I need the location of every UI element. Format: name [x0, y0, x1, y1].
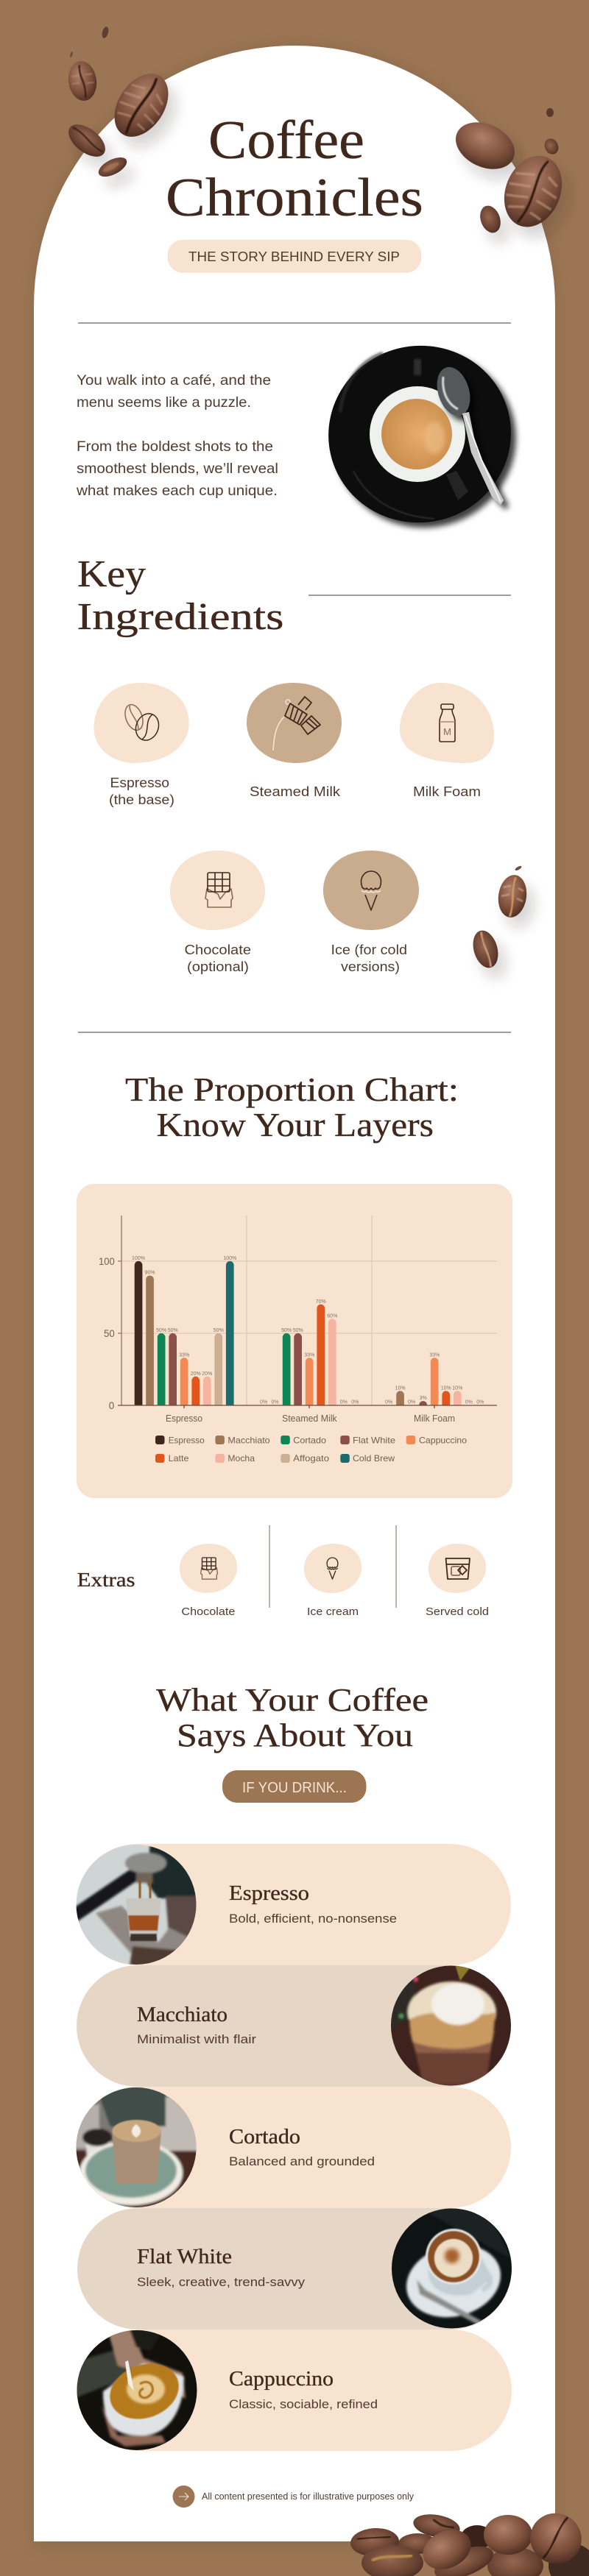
series: affogato: 50%	[214, 1328, 224, 1333]
series: mocha	[202, 1313, 462, 1405]
ingredient: ice: versions)	[341, 959, 400, 974]
ingredient: ice: Ice (for cold	[331, 943, 407, 957]
intro text: menu seems like a puzzle.	[77, 394, 251, 411]
photo: flat white cup	[392, 2209, 512, 2328]
chart legend: Cappuccino	[419, 1435, 467, 1445]
chart legend: Mocha	[228, 1453, 255, 1463]
extra: served cold: Served cold	[426, 1605, 489, 1618]
series: cold brew: 100%	[223, 1256, 236, 1261]
series: latte	[191, 1299, 451, 1405]
series: flat white: 50%	[293, 1328, 303, 1333]
icon: ice cream cone	[361, 871, 381, 910]
x axis labels: Milk Foam	[414, 1413, 455, 1424]
ingredient: espresso: (the base)	[109, 792, 174, 807]
floating beans mid right	[469, 865, 529, 971]
chart legend	[155, 1435, 467, 1463]
row: espresso: Espresso	[229, 1882, 309, 1905]
footer note: All content presented is for illustrative purposes only	[202, 2491, 415, 2502]
ingredient: espresso	[94, 683, 189, 807]
heading: what your coffee says about you: Says About You	[177, 1717, 413, 1753]
row: espresso	[74, 1839, 511, 1972]
series: cortado: 0%	[408, 1400, 415, 1405]
series: macchiato: 90%	[145, 1271, 155, 1276]
row: flat white: Flat White	[137, 2246, 232, 2268]
series: espresso: 100%	[132, 1256, 145, 1261]
heading: extras: Extras	[77, 1569, 135, 1591]
y axis labels: 50	[104, 1328, 115, 1339]
intro text: From the boldest shots to the	[77, 439, 273, 455]
row: macchiato	[77, 1961, 515, 2090]
row: cappuccino: Cappuccino	[229, 2368, 334, 2391]
icon: pouring pitcher	[273, 697, 320, 751]
chart legend: Flat White	[353, 1435, 395, 1445]
intro text	[76, 372, 278, 499]
photo: cortado latte	[77, 2087, 196, 2207]
title	[166, 110, 423, 228]
footer note	[172, 2485, 415, 2508]
intro text: smoothest blends, we’ll reveal	[77, 461, 278, 477]
row: macchiato: Macchiato	[137, 2004, 228, 2026]
photo: cappuccino latte art	[77, 2330, 197, 2450]
series: latte: 70%	[316, 1299, 326, 1305]
x axis labels: Steamed Milk	[282, 1413, 337, 1424]
series: affogato: 0%	[465, 1400, 473, 1405]
series: cortado	[156, 1328, 415, 1405]
heading: key ingredients	[77, 553, 284, 638]
ingredient: steamed milk: Steamed Milk	[250, 784, 341, 799]
row: cappuccino	[74, 2325, 512, 2454]
zero labels: 0%	[260, 1400, 267, 1405]
floating beans top left	[63, 26, 180, 180]
if you drink pill: IF YOU DRINK...	[242, 1780, 347, 1796]
ingredient: steamed milk	[247, 683, 342, 799]
title: Chronicles	[166, 168, 423, 228]
series: cortado: 50%	[156, 1328, 166, 1333]
extra: ice cream: Ice cream	[307, 1605, 359, 1618]
series: latte: 20%	[191, 1372, 201, 1377]
series: cappuccino: 33%	[429, 1352, 440, 1358]
series: affogato	[214, 1328, 473, 1405]
icon: chocolate bar	[201, 1558, 218, 1579]
series: cappuccino	[179, 1352, 440, 1405]
row: cortado: Cortado	[229, 2126, 300, 2149]
series: mocha: 10%	[452, 1385, 462, 1391]
chart legend: Cortado	[293, 1435, 326, 1445]
chart legend: Cold Brew	[353, 1453, 395, 1463]
x axis labels	[166, 1413, 455, 1424]
icon: iced glass	[446, 1558, 470, 1579]
photo: macchiato glass	[391, 1966, 511, 2085]
coffee bean pile bottom right	[350, 2513, 589, 2576]
intro text: You walk into a café, and the	[77, 372, 271, 388]
icon: ice cream cone	[327, 1558, 338, 1579]
row: cappuccino: Classic, sociable, refined	[229, 2397, 378, 2411]
heading: the proportion chart: Know Your Layers	[156, 1106, 434, 1143]
heading: key ingredients: Key	[77, 553, 146, 595]
row: macchiato: Minimalist with flair	[137, 2032, 256, 2046]
if you drink pill	[222, 1770, 367, 1803]
intro text: what makes each cup unique.	[76, 483, 278, 499]
series: mocha: 20%	[202, 1372, 212, 1377]
extra: served cold	[426, 1544, 489, 1618]
series: espresso	[132, 1256, 145, 1405]
photo: espresso cup on black saucer	[312, 329, 527, 539]
panel: chart card	[77, 1184, 512, 1498]
series: macchiato	[145, 1271, 406, 1405]
photo: espresso shot	[77, 1845, 196, 1965]
series: flat white: 50%	[168, 1328, 178, 1333]
heading: the proportion chart: The Proportion Chart:	[125, 1071, 459, 1108]
row: cortado: Balanced and grounded	[229, 2154, 375, 2168]
series: affogato: 0%	[340, 1400, 348, 1405]
heading: what your coffee says about you	[156, 1682, 428, 1753]
series: flat white: 3%	[420, 1396, 427, 1401]
series: mocha: 60%	[327, 1313, 337, 1319]
heading: the proportion chart	[125, 1071, 459, 1143]
series: macchiato: 0%	[272, 1400, 279, 1405]
series: cortado: 50%	[281, 1328, 292, 1333]
extra: chocolate	[180, 1544, 237, 1618]
ingredient: chocolate: Chocolate	[184, 943, 251, 957]
ingredient: milk foam: Milk Foam	[413, 784, 481, 799]
extra: chocolate: Chocolate	[181, 1605, 235, 1618]
chart legend: Espresso	[169, 1435, 205, 1445]
y axis labels: 100	[99, 1256, 115, 1267]
row: cortado	[74, 2082, 511, 2213]
row: espresso: Bold, efficient, no-nonsense	[229, 1912, 397, 1926]
subtitle pill: THE STORY BEHIND EVERY SIP	[188, 249, 400, 264]
chart legend: Affogato	[293, 1453, 329, 1463]
ingredient: milk foam	[400, 683, 494, 799]
icon: milk bottle	[440, 704, 455, 742]
ingredient: chocolate: (optional)	[187, 959, 249, 974]
icon: arrow circle	[172, 2485, 194, 2508]
series: macchiato: 10%	[395, 1385, 406, 1391]
series: cappuccino: 33%	[179, 1352, 189, 1358]
chart legend: Latte	[169, 1453, 189, 1463]
heading: what your coffee says about you: What Your Coffee	[156, 1682, 428, 1718]
row: flat white: Sleek, creative, trend-savvy	[137, 2275, 306, 2289]
series: cappuccino: 33%	[304, 1352, 314, 1358]
floating beans top right	[448, 108, 572, 235]
chart legend: Macchiato	[228, 1435, 270, 1445]
ingredient: chocolate	[170, 851, 265, 974]
heading: key ingredients: Ingredients	[77, 596, 284, 638]
subtitle pill	[168, 240, 421, 273]
icon: chocolate bar	[205, 873, 233, 907]
zero labels	[260, 1400, 392, 1405]
icon: coffee beans	[122, 702, 163, 744]
icon: milk bottle: M	[443, 726, 451, 737]
extra: ice cream	[304, 1544, 361, 1618]
zero labels: 0%	[385, 1400, 392, 1405]
y axis labels: 0	[109, 1400, 114, 1411]
row: flat white	[77, 2204, 519, 2332]
series: cold brew: 0%	[476, 1400, 484, 1405]
series: cold brew	[223, 1256, 484, 1405]
title: Coffee	[208, 110, 364, 171]
ingredient: ice	[323, 851, 419, 974]
y axis labels	[99, 1256, 115, 1411]
x axis labels: Espresso	[166, 1413, 202, 1424]
series: flat white	[168, 1328, 427, 1405]
bar chart	[99, 1216, 497, 1463]
series: latte: 10%	[441, 1385, 451, 1391]
series: cold brew: 0%	[351, 1400, 359, 1405]
ingredient: espresso: Espresso	[110, 776, 169, 790]
